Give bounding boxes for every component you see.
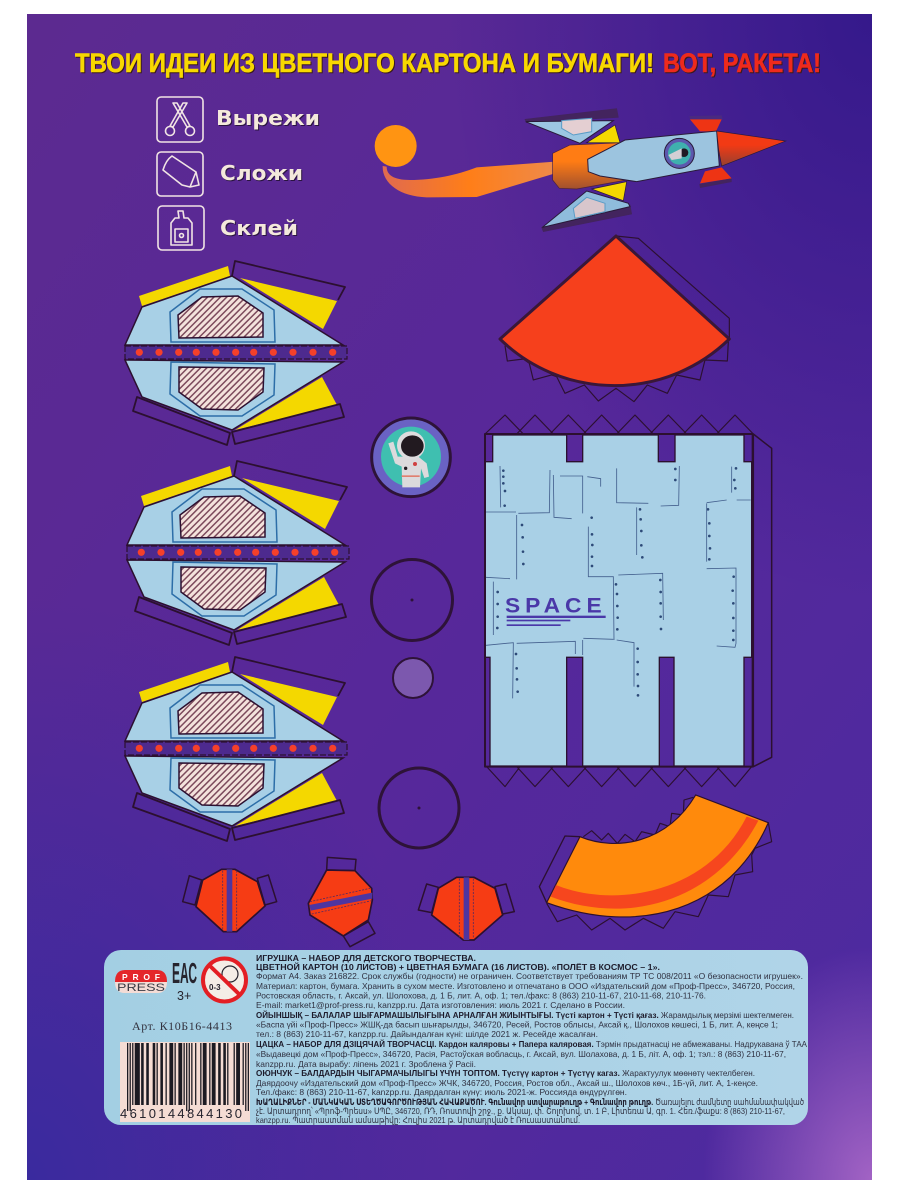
info panel: ЕАС	[172, 958, 197, 990]
logo: Prof Press	[115, 970, 167, 994]
disc outline 1	[372, 560, 452, 640]
ship net 3	[125, 657, 347, 841]
fins	[689, 115, 732, 188]
icon: scissors	[157, 97, 203, 142]
legal text: тел.: 8 (863) 210-11-67, kanzpp.ru. Дайындалған күні: шілде 2021 ж. Ресейде жасалған.	[256, 1029, 598, 1039]
icon: folded card	[157, 152, 203, 196]
legal text: ОЙЫНШЫҚ – БАЛАЛАР ШЫҒАРМАШЫЛЫҒЫНА АРНАЛҒАН ЖИЫНТЫҒЫ. Түсті картон + Түсті қағаз. Жарамдылық мерзімі шектелмеген.	[256, 1009, 794, 1020]
legal text: չէ. Արտադրող՝ «Պրոֆ-Պրեսս» ՍՊԸ, 346720, ՌԴ, Ռոստովի շրջ., ք. Ակսայ, փ. Շոլոխով, տ. 1 Բ, Լիտեռա Ա, գր. 1. Հեռ./ֆաքս: 8 (863) 210-11-67,	[256, 1106, 785, 1116]
arc band net	[539, 795, 772, 930]
legal text: kanzpp.ru. Պատրաստման ամսաթիվը: Հուլիս 2021 թ. Արտադրված է Ռուսաստանում.	[256, 1115, 580, 1125]
red piece 2	[308, 857, 375, 947]
legal text: ԽԱՂԱԼԻՔՆԵՐ - ՄԱՆԿԱԿԱՆ ՍՏԵՂԾԱԳՈՐԾՈՒԹՅԱՆ ՀԱՎԱՔԱԾՈՒ. Գունավոր ստվարաթուղթ + Գունավոր թուղթ. Ծառայելու ժամկետը սահմանափակված	[256, 1097, 804, 1107]
astronaut badge	[372, 418, 450, 497]
legal text: ЦАЦКА – НАБОР ДЛЯ ДЗІЦЯЧАЙ ТВОРЧАСЦІ. Кардон каляровы + Папера каляровая. Тэрмін прыдатнасці не абмежаваны. Надрукавана ў ТАА	[256, 1038, 807, 1049]
cone glue tabs	[505, 236, 729, 402]
SPACE logo	[505, 593, 607, 626]
exhaust flame	[383, 162, 555, 197]
rocket illustration	[375, 109, 786, 232]
barcode	[120, 1042, 250, 1122]
label: cut: Вырежи	[216, 106, 320, 130]
article number: Арт. К10Б16-4413	[132, 1019, 232, 1033]
ship net 1	[125, 261, 347, 445]
red piece 1	[183, 869, 277, 932]
cone sector	[500, 236, 729, 386]
legal text: ИГРУШКА – НАБОР ДЛЯ ДЕТСКОГО ТВОРЧЕСТВА.	[256, 953, 476, 963]
legal text: Материал: картон, бумага. Хранить в сухом месте. Изготовлено и отпечатано в ООО «Издательский дом «Проф-Пресс», 346720, Россия,	[256, 981, 795, 991]
arc stripe	[551, 817, 758, 909]
red piece 3	[418, 877, 514, 940]
title: ВОТ, РАКЕТА!	[663, 48, 821, 78]
glue teeth	[485, 415, 753, 787]
rivets	[497, 468, 736, 695]
legal text: Даярдоочу «Издательский дом «Проф-Пресс» ЖЧК, 346720, Россия, Ростов обл., Аксай ш., Шолохов көч., 1Б-үй, лит. А, 1-кеңсе.	[256, 1078, 758, 1088]
blue panel	[485, 435, 752, 766]
nose cone	[717, 131, 786, 166]
astronaut figure	[388, 431, 429, 487]
porthole	[664, 138, 694, 168]
icon: glue bottle	[158, 206, 204, 250]
legal text: «Выдавецкі дом «Проф-Пресс», 346720, Расія, Растоўская вобласць, г. Аксай, вул. Шолахова, д. 1 Б, літ. А, оф. 1; тэл.: 8 (863) 210-11-67,	[256, 1049, 786, 1059]
legal text: E-mail: market1@prof-press.ru, kanzpp.ru. Дата изготовления: июль 2021 г. Сделано в России.	[256, 1000, 625, 1010]
rivet lines	[486, 466, 751, 698]
upper wing	[525, 109, 620, 143]
icon: not for ages 0-3	[203, 958, 246, 1002]
nozzle	[553, 143, 627, 189]
icon: not for ages 0-3: 0-3	[209, 983, 221, 992]
legal text: Тел./факс: 8 (863) 210-11-67, kanzpp.ru. Даярдалган күнү: июль 2021-ж. Россияда өндүрүлгөн.	[256, 1087, 627, 1097]
side flap	[753, 434, 772, 767]
logo: Prof Press: PROF	[122, 972, 160, 982]
logo: Prof Press: PRESS	[117, 982, 165, 994]
legal text	[256, 953, 807, 1125]
legal text: Ростовская область, г. Аксай, ул. Шолохова, д. 1 Б, лит. А, оф. 1; тел./факс: 8 (863) 210-11-67, 210-11-68, 210-11-76.	[256, 990, 706, 1000]
title: ТВОИ ИДЕИ ИЗ ЦВЕТНОГО КАРТОНА И БУМАГИ!	[75, 48, 654, 78]
info panel	[104, 950, 808, 1125]
exhaust ball	[375, 125, 417, 167]
arc tabs	[539, 797, 772, 930]
ship net 2	[127, 461, 349, 645]
age mark: 3+	[177, 989, 191, 1003]
lower wing	[542, 182, 632, 232]
label: glue: Склей	[220, 216, 298, 240]
legal text: ЦВЕТНОЙ КАРТОН (10 ЛИСТОВ) + ЦВЕТНАЯ БУМАГА (16 ЛИСТОВ). «ПОЛЁТ В КОСМОС – 1».	[256, 961, 660, 972]
panel outline	[485, 434, 753, 767]
disc outline 2	[379, 768, 459, 848]
small disc	[393, 658, 433, 698]
step: cut	[157, 97, 320, 142]
arc body	[547, 795, 768, 917]
step: fold	[157, 152, 303, 196]
body	[588, 131, 719, 182]
legal text: kanzpp.ru. Дата вырабу: ліпень 2021 г. Зроблена ў Расіі.	[256, 1059, 476, 1069]
legal text: Формат А4. Заказ 216822. Срок службы (годности) не ограничен. Соответствует требованиям ТР ТС 008/2011 «О безопасности игрушек».	[256, 971, 803, 981]
label: fold: Сложи	[220, 161, 303, 185]
SPACE logo: SPACE	[505, 593, 607, 617]
step: glue	[158, 206, 298, 250]
rocket body net	[485, 415, 772, 787]
legal text: «Баспа үйі «Проф-Пресс» ЖШҚ-да басып шығарылды, 346720, Ресей, Ростов облысы, Аксай қ., Шолохов көшесі, 1 Б, лит. А, кеңсе 1;	[256, 1020, 778, 1030]
nose cone net	[500, 236, 729, 402]
legal text: ОЮНЧУК – БАЛДАРДЫН ЧЫГАРМАЧЫЛЫГЫ ҮЧҮН ТОПТОМ. Түстүү картон + Түстүү кагаз. Жарактуулук мөөнөтү чектелбеген.	[256, 1068, 755, 1078]
barcode: 4610144844130	[120, 1106, 242, 1121]
